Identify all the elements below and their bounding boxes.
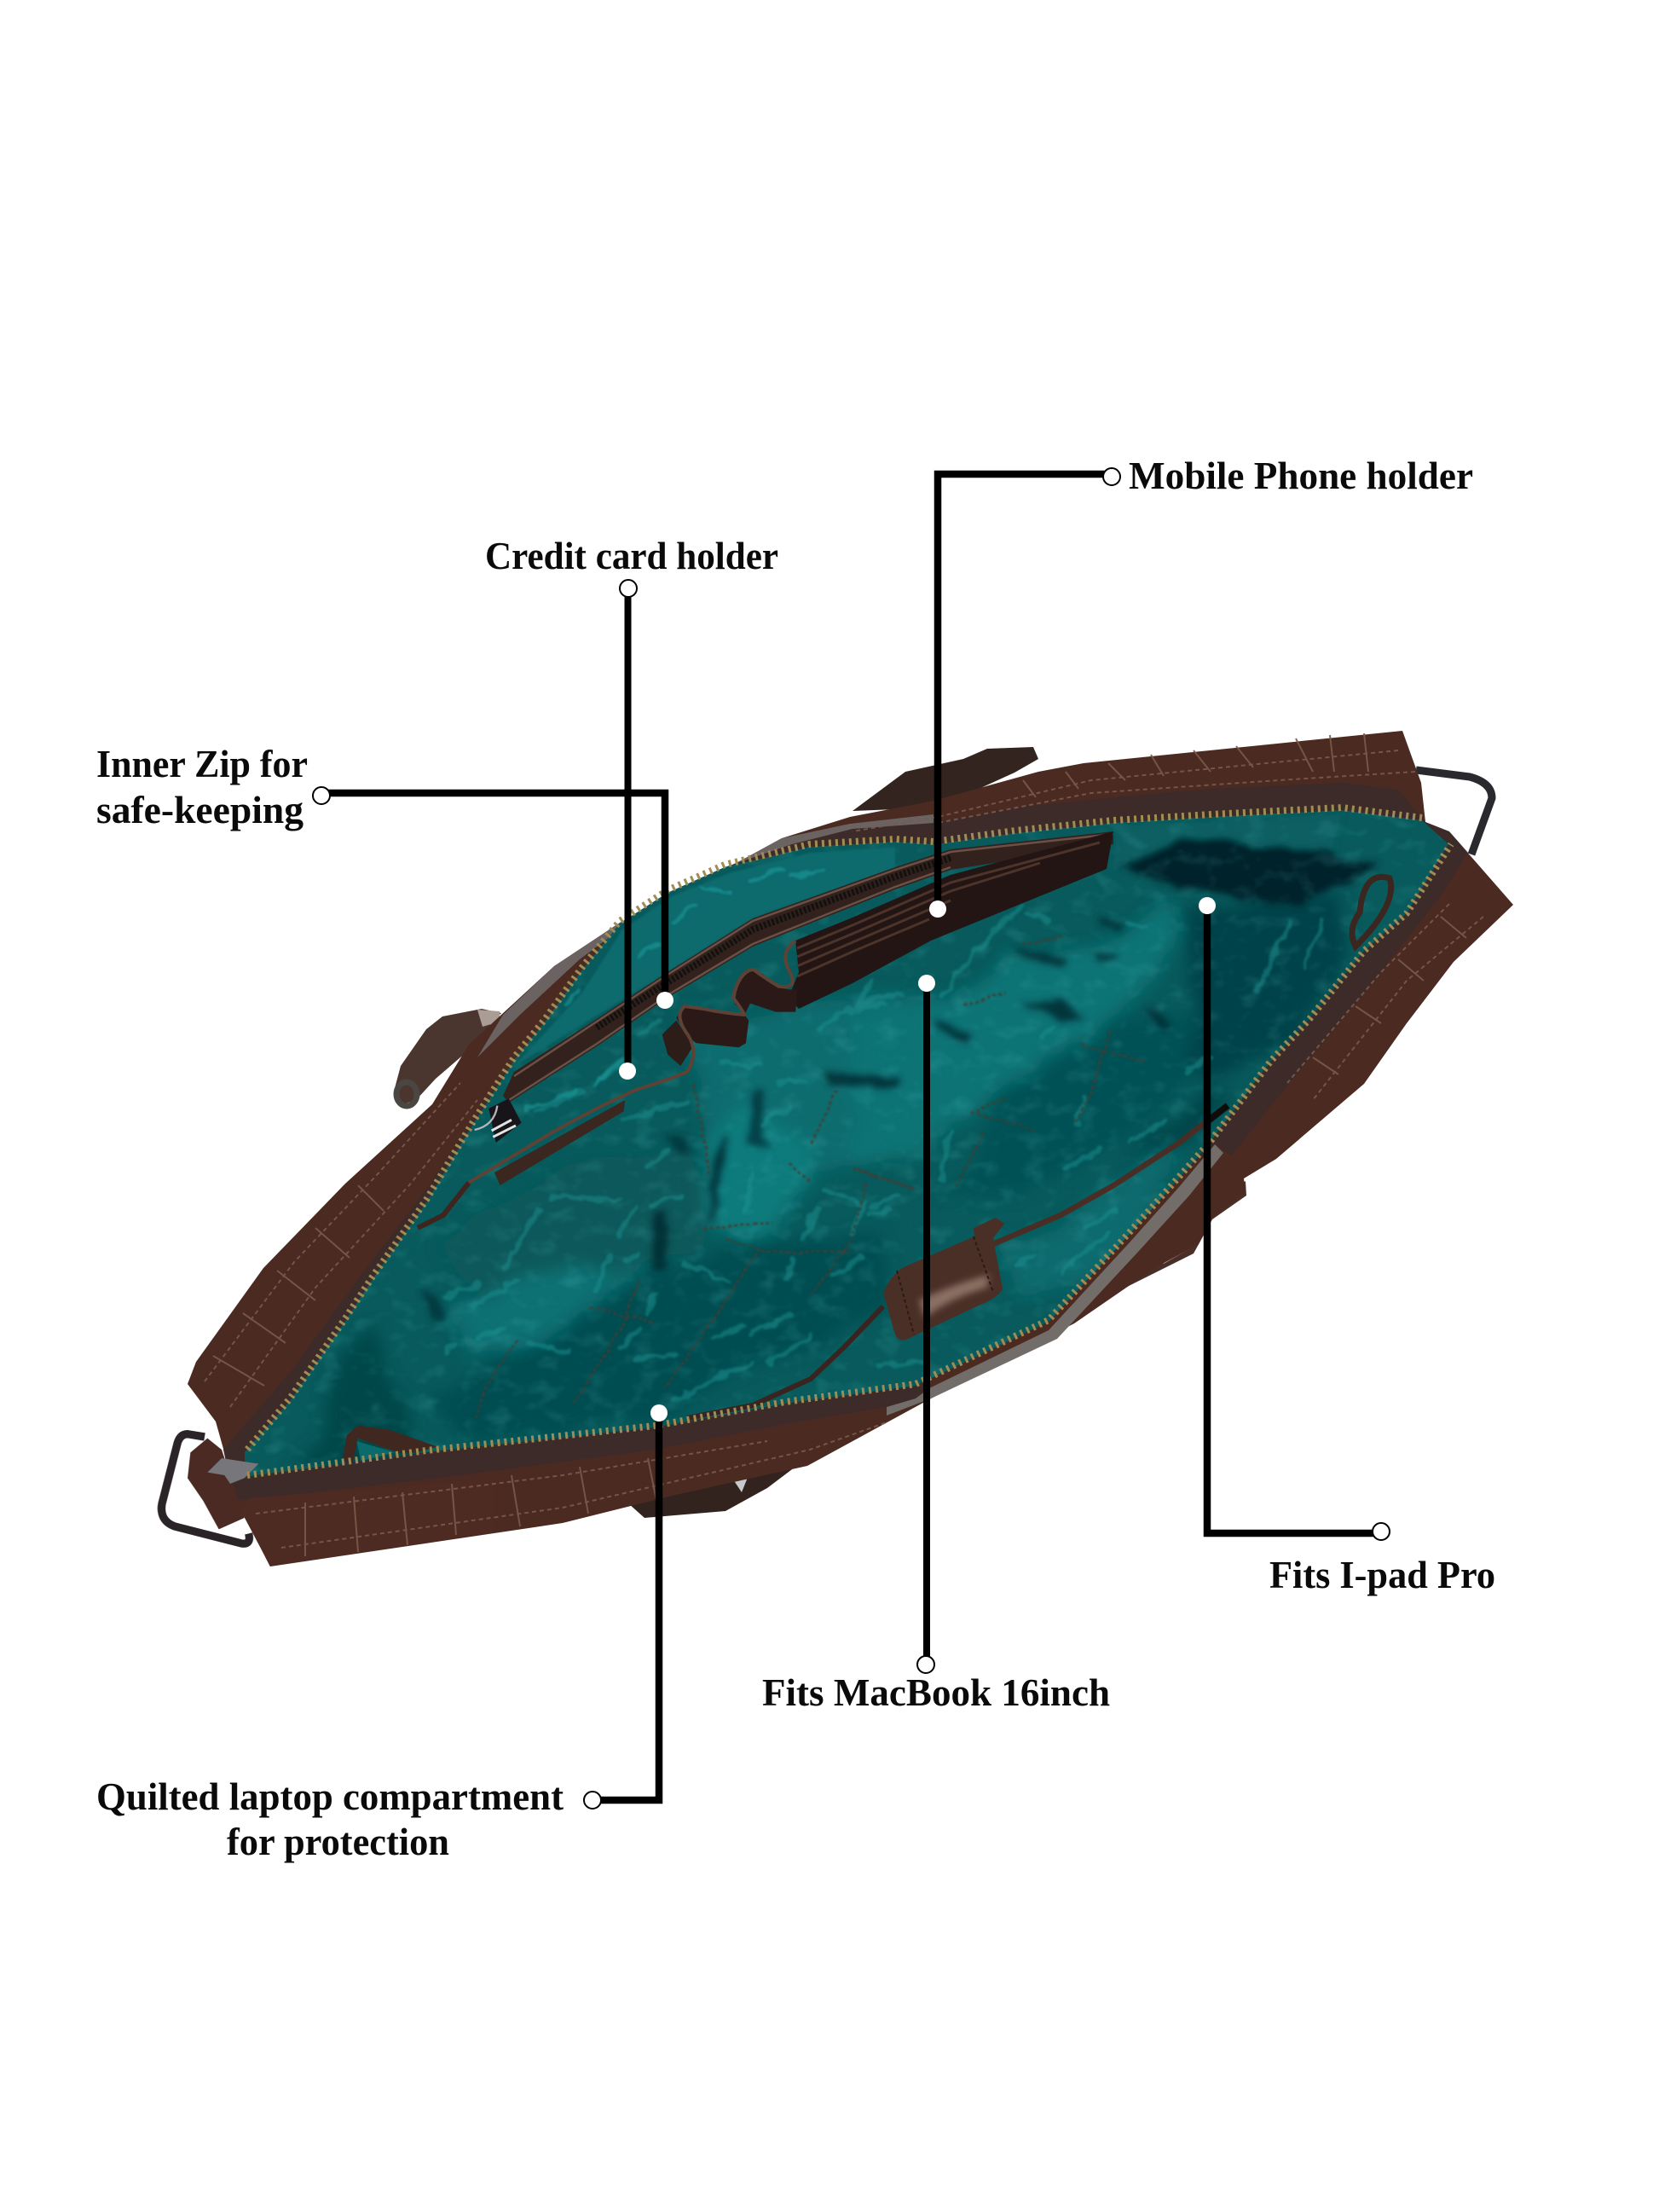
- upper lip of lining above pocket band: [514, 847, 895, 1066]
- right end loop: [1352, 877, 1391, 947]
- dark crease streaks: [419, 914, 1172, 1320]
- callout: quilted laptop compartment: for protection: [227, 1820, 449, 1863]
- leather cylinder keeper: [883, 1218, 1004, 1341]
- gold zipper teeth: [247, 808, 1451, 1475]
- crocodile texture and stitches: [205, 733, 1483, 1556]
- zipper tape: [223, 783, 1468, 1501]
- continuation of left piping: [418, 1183, 469, 1228]
- callout: fits iPad Pro: [1199, 897, 1495, 1596]
- label: credit card holder: Credit card holder: [485, 534, 778, 577]
- lower corner tab: [343, 1426, 437, 1464]
- sheen on upper lip: [526, 870, 824, 1109]
- callout: fits MacBook 16 inch: [762, 975, 1110, 1714]
- label: fits iPad Pro: Fits I-pad Pro: [1269, 1553, 1495, 1596]
- label: fits MacBook: Fits MacBook 16inch: [762, 1671, 1110, 1714]
- callout: quilted laptop compartment: [96, 1404, 668, 1863]
- callout: inner zip: [96, 742, 673, 1009]
- zip pull: [488, 1098, 522, 1143]
- inner zip pocket band: [503, 831, 1113, 1103]
- callout: inner zip: safe-keeping: [96, 788, 303, 831]
- dark upper right pocket fold: [1120, 836, 1379, 911]
- callout: mobile phone holder: [929, 454, 1473, 918]
- bag: open leather briefcase with teal lining: [161, 731, 1513, 1566]
- label: quilted laptop compartment: Quilted laptop compartment: [96, 1775, 564, 1818]
- callout: credit card holder: [485, 534, 778, 1080]
- left end cap with D-ring and tab: [161, 1434, 494, 1566]
- left handle hardware: [394, 1009, 501, 1105]
- label: mobile phone holder: Mobile Phone holder: [1129, 454, 1473, 497]
- top handle hardware: [853, 747, 1038, 811]
- mobile phone pocket strip: [789, 831, 1113, 1009]
- right D-ring: [1416, 770, 1492, 854]
- card slot beneath piping: [494, 1100, 625, 1185]
- grey leather highlights, lower right: [887, 1144, 1223, 1416]
- lower piping: [993, 1105, 1228, 1244]
- credit card ruffle: [469, 941, 797, 1185]
- light brand print on lining: [446, 905, 1322, 1402]
- leather outer shell: [188, 731, 1513, 1566]
- label: inner zip: Inner Zip for: [96, 742, 308, 785]
- lower right handle hardware: [1108, 1181, 1246, 1296]
- large lining folds: [296, 892, 1342, 1477]
- bottom handle hardware: [628, 1454, 812, 1518]
- teal lining: [213, 793, 1475, 1501]
- quilting stitches: [475, 937, 1146, 1422]
- mottled fabric sheen: [250, 814, 1439, 1474]
- grey leather highlights, upper left: [477, 814, 934, 1057]
